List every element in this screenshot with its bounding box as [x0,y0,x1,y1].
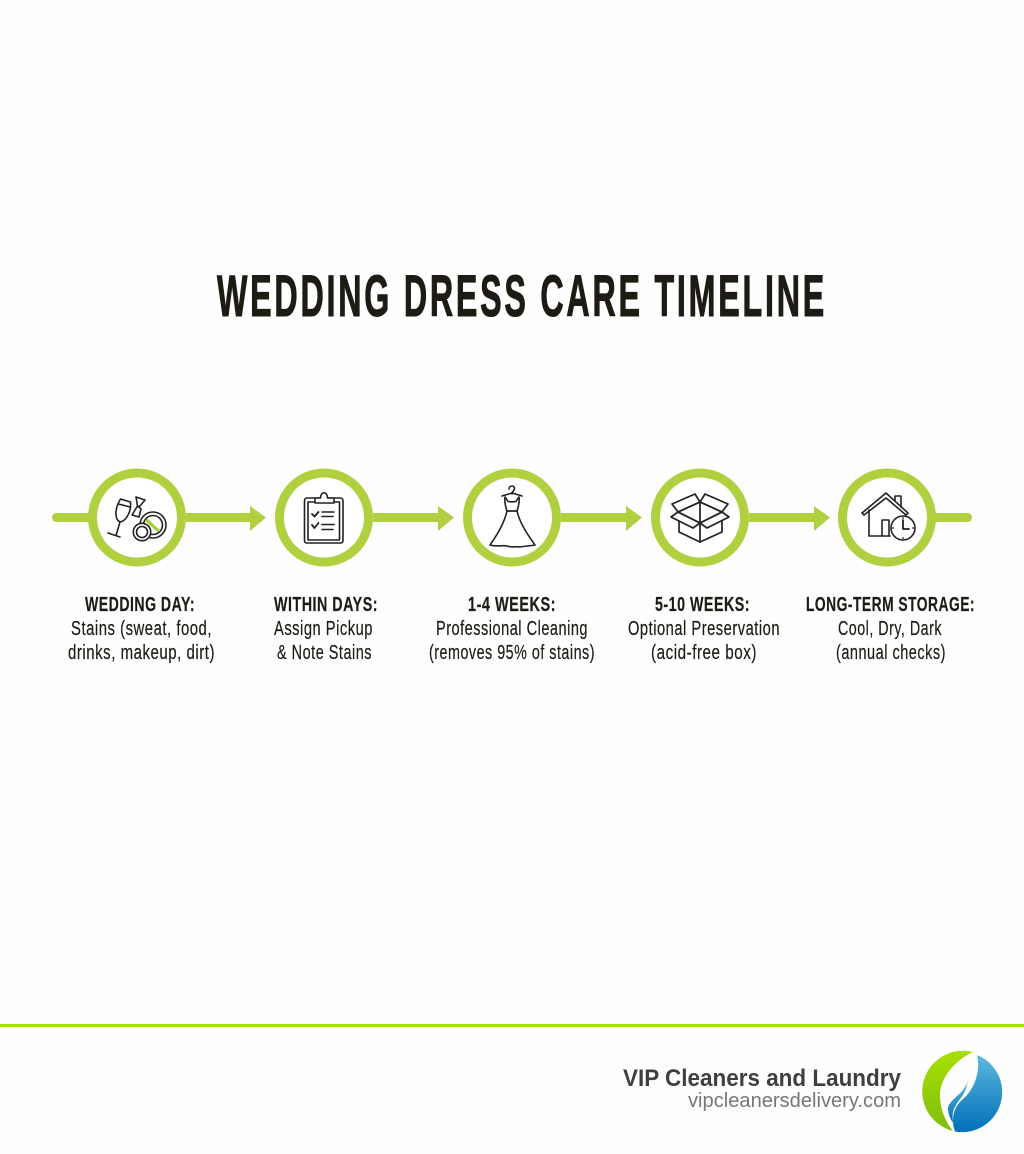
step 5 label [806,594,975,664]
logo [922,1051,1002,1132]
arrow: step 3 to 4 [561,506,642,531]
step 1 label: WEDDING DAY: [85,594,195,616]
arrow: step 1 to 2 [186,506,266,531]
step 4 label: (acid-free box) [651,642,757,664]
step 4 label: 5-10 WEEKS: [655,594,750,616]
step 1 ring and icon: glass, bow and plates [92,473,182,562]
step 1 label: Stains (sweat, food, [71,618,212,640]
step 3 label: (removes 95% of stains) [429,642,595,664]
step 1 label [68,594,215,664]
step 2 label: WITHIN DAYS: [274,594,378,616]
footer company name: VIP Cleaners and Laundry [623,1065,902,1092]
step 1 label: drinks, makeup, dirt) [68,642,215,664]
step 5 label: (annual checks) [836,642,946,664]
arrow: step 2 to 3 [373,506,454,531]
step 4 label: Optional Preservation [628,618,780,640]
step 3 label: Professional Cleaning [436,618,588,640]
step 5 ring and icon: house with clock [842,473,932,562]
step 2 label: & Note Stains [277,642,372,664]
footer divider [0,1024,1024,1027]
step 2 ring and icon: clipboard [280,473,368,562]
step 2 label [274,594,378,664]
step 4 ring and icon: open box [656,473,744,562]
step 3 label: 1-4 WEEKS: [468,594,556,616]
footer website: vipcleanersdelivery.com [688,1090,901,1112]
step 3 label [429,594,595,664]
step 4 label [628,594,780,664]
step 5 label: Cool, Dry, Dark [838,618,942,640]
step 2 label: Assign Pickup [274,618,373,640]
arrow: step 4 to 5 [749,506,830,531]
step 3 ring and icon: dress on hanger [468,473,556,562]
timeline connector: end line [936,513,968,522]
timeline connector: start line [56,513,92,522]
